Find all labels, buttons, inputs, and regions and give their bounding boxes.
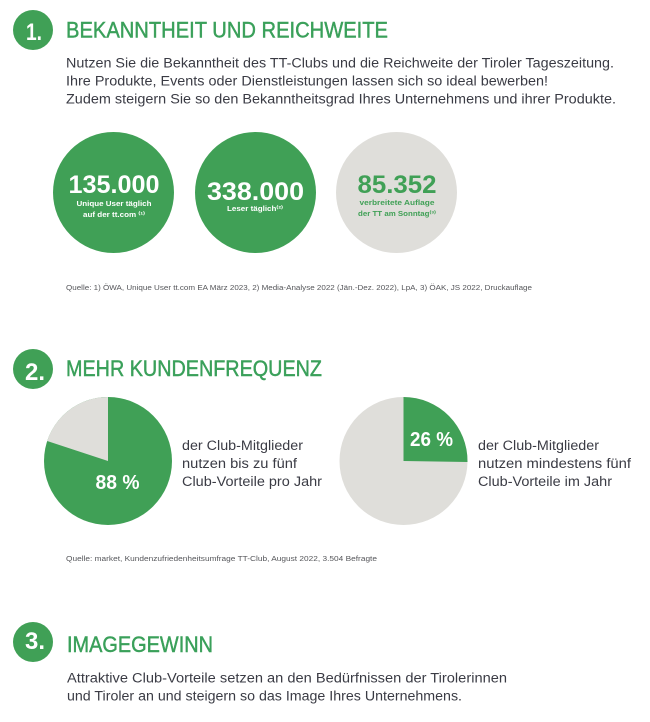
body text: section 3: Attraktive Club-Vorteile setzen an den Bedürfnissen der Tirolerinnen (67, 671, 507, 686)
caption: pie 1: der Club-Mitglieder (182, 438, 304, 453)
caption: pie 1 (182, 438, 323, 489)
body text: section 3 (67, 671, 507, 704)
source note: section 1: Quelle: 1) ÖWA, Unique User tt.com EA März 2023, 2) Media-Analyse 2022 (Jän.-Dez. 2022), LpA, 3) ÖAK, JS 2022, Druckauflage (66, 284, 532, 292)
stat circle: 85.352 (336, 132, 457, 253)
caption: pie 1: Club-Vorteile pro Jahr (182, 474, 323, 489)
badge: number 2 (13, 349, 53, 389)
badge: number 1: 1. (26, 19, 42, 46)
body text: section 1 (66, 56, 616, 107)
stat circle: 85.352: verbreitete Auflage (360, 198, 434, 207)
stat circle: 338.000: Leser täglich⁽²⁾ (227, 204, 283, 213)
pie chart: 88 %: 88 % (96, 472, 140, 494)
stat circle: 135.000: Unique User täglich (76, 199, 152, 208)
stat circle: 85.352: der TT am Sonntag⁽³⁾ (358, 209, 436, 218)
stat circle: 135.000: auf der tt.com ⁽¹⁾ (83, 210, 145, 219)
pie chart: 88 % (44, 397, 172, 525)
body text: section 1: Nutzen Sie die Bekanntheit des TT-Clubs und die Reichweite der Tiroler Tageszeitung. (66, 56, 614, 71)
section 1: Bekanntheit und Reichweite (13, 10, 616, 292)
stat circle: 135.000: 135.000 (68, 171, 160, 199)
pie chart: 26 %: 26 % (410, 429, 453, 451)
badge: number 1 (13, 10, 53, 50)
pie chart: 26 % (340, 397, 468, 525)
caption: pie 2: Club-Vorteile im Jahr (478, 474, 613, 489)
caption: pie 2: der Club-Mitglieder (478, 438, 600, 453)
body text: section 1: Zudem steigern Sie so den Bekanntheitsgrad Ihres Unternehmens und ihrer Produkte. (66, 92, 616, 107)
body text: section 3: und Tiroler an und steigern so das Image Ihres Unternehmens. (67, 689, 462, 704)
source note: section 2: Quelle: market, Kundenzufriedenheitsumfrage TT-Club, August 2022, 3.504 Befragte (66, 556, 377, 563)
stat circle: 338.000 (195, 132, 316, 253)
caption: pie 1: nutzen bis zu fünf (182, 456, 297, 471)
badge: number 3: 3. (25, 628, 45, 655)
caption: pie 2 (478, 438, 631, 489)
section 3: Imagegewinn (13, 622, 507, 704)
section 2: Mehr Kundenfrequenz (13, 349, 631, 563)
stat circle: 338.000: 338.000 (207, 178, 304, 206)
stat circle: 135.000 (53, 132, 174, 253)
badge: number 2: 2. (25, 359, 45, 386)
heading: Bekanntheit und Reichweite: BEKANNTHEIT UND REICHWEITE (66, 18, 388, 42)
stat circle: 85.352: 85.352 (358, 171, 436, 199)
caption: pie 2: nutzen mindestens fünf (478, 456, 631, 471)
heading: Imagegewinn: IMAGEGEWINN (67, 632, 213, 657)
heading: Mehr Kundenfrequenz: MEHR KUNDENFREQUENZ (66, 356, 322, 381)
body text: section 1: Ihre Produkte, Events oder Dienstleistungen lassen sich so ideal bewerben! (66, 74, 548, 89)
badge: number 3 (13, 622, 53, 662)
